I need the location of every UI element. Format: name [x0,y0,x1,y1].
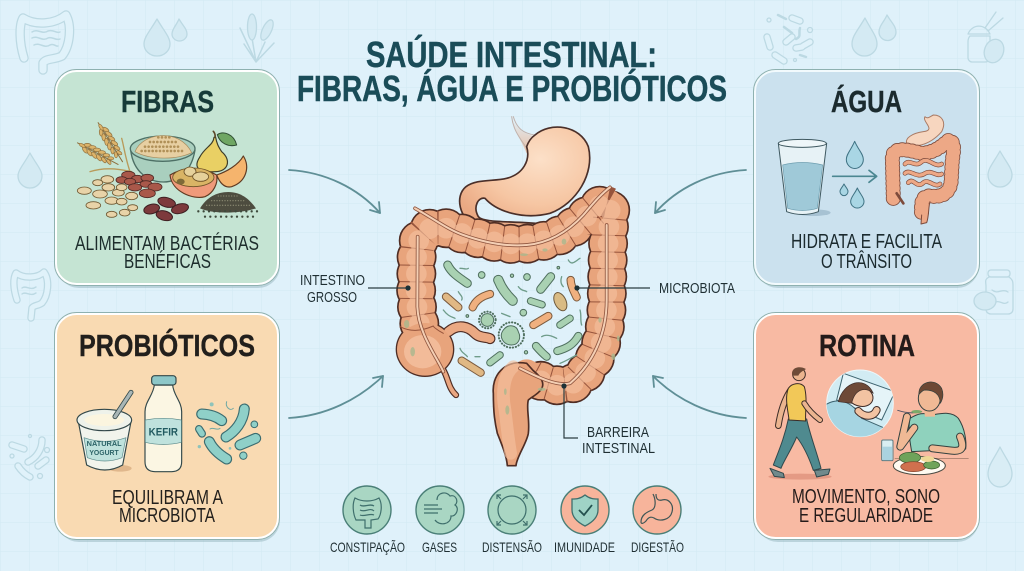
text: movimento, sono e regularidade: E REGULARIDADE [799,505,933,527]
callout: microbiota [574,280,735,297]
callout: barreira intestinal [561,383,655,457]
title [297,33,727,109]
illustration: yogurt, kefir, bacteria: NATURAL [87,439,122,448]
icon: distensão [482,486,542,555]
arrow: probióticos to intestine [289,376,383,418]
heading: fibras: FIBRAS [121,84,214,119]
text: alimentam bactérias benéficas [75,232,259,273]
text: equilibram a microbiota: MICROBIOTA [119,505,216,527]
callout: intestino grosso: INTESTINO [300,272,365,289]
panel: água [754,70,980,288]
label: digestão: DIGESTÃO [631,539,684,555]
callout: microbiota: MICROBIOTA [659,280,735,297]
arrow: rotina to intestine [653,376,746,418]
panel: fibras [54,70,280,288]
icon: constipação [330,486,405,555]
heading: probióticos: PROBIÓTICOS [79,327,255,363]
text: equilibram a microbiota: EQUILIBRAM A [112,487,224,509]
label: imunidade: IMUNIDADE [554,539,615,555]
illustration: yogurt, kefir, bacteria [77,376,258,472]
large intestine (colon) [397,187,620,466]
central digestive system illustration [396,117,620,466]
text: movimento, sono e regularidade: MOVIMENTO, SONO [792,486,940,508]
text: hidrata e facilita o trânsito [791,231,943,273]
illustration: fibre foods [75,119,258,222]
illustration: water glass to intestine [778,115,954,224]
heading: água: ÁGUA [831,84,902,119]
icon: digestão [631,486,684,555]
callout: barreira intestinal: INTESTINAL [582,440,655,457]
illustration: yogurt, kefir, bacteria: YOGURT [89,448,119,457]
title: FIBRAS, ÁGUA E PROBIÓTICOS [297,67,727,109]
panel: probióticos [54,312,280,542]
label: distensão: DISTENSÃO [482,539,542,555]
arrow: fibras to intestine [289,170,380,213]
illustration: walking, sleeping, eating [768,367,968,480]
callout: barreira intestinal: BARREIRA [587,424,649,441]
illustration: yogurt, kefir, bacteria: KEFIR [149,426,178,438]
callout: intestino grosso: GROSSO [307,289,357,306]
label: constipação: CONSTIPAÇÃO [330,539,405,555]
panel: rotina [754,312,980,542]
icon: imunidade [554,486,615,555]
text: hidrata e facilita o trânsito: O TRÂNSITO [821,250,912,273]
heading: rotina: ROTINA [819,328,915,363]
stomach [460,117,590,227]
arrow: água to intestine [655,170,746,213]
text: alimentam bactérias benéficas: BENÉFICAS [124,250,211,273]
icon: gases [416,486,464,555]
title: SAÚDE INTESTINAL: [366,33,657,75]
label: gases: GASES [422,539,457,555]
text: hidrata e facilita o trânsito: HIDRATA E FACILITA [791,231,943,253]
microbiota bacteria [443,258,582,373]
callout: intestino grosso [300,272,411,306]
text: movimento, sono e regularidade [792,486,940,527]
text: equilibram a microbiota [112,487,224,527]
text: alimentam bactérias benéficas: ALIMENTAM BACTÉRIAS [75,232,259,255]
